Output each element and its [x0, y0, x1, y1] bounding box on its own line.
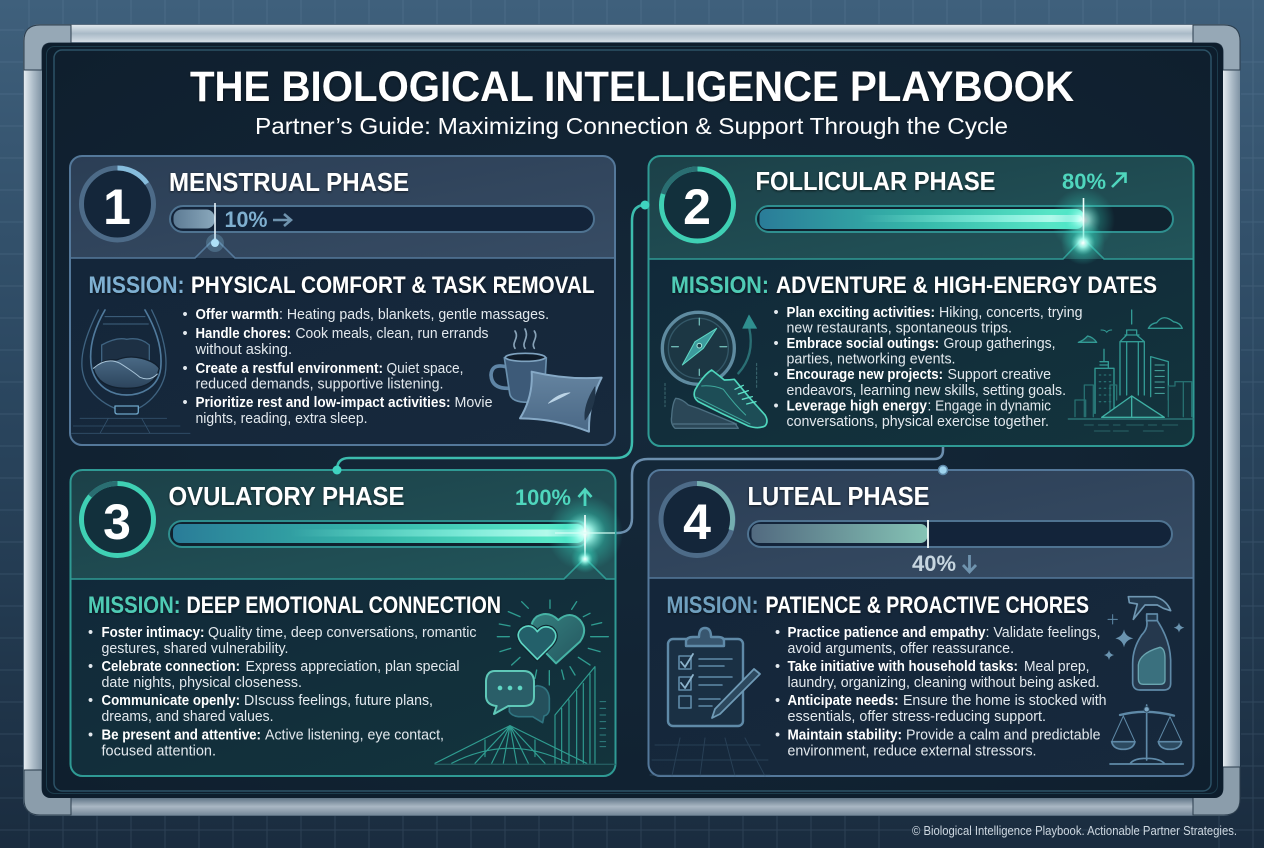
connector node: phase 2 left — [640, 200, 650, 210]
bullet list: Active listening, eye contact, — [265, 728, 444, 744]
bullet list: conversations, physical exercise together. — [786, 414, 1049, 430]
bullet list: Foster intimacy: — [102, 625, 204, 641]
connector node: phase 3 top — [332, 466, 342, 474]
bullet list: Cook meals, clean, run errands — [296, 326, 488, 342]
icon: coffee cup and pillow — [491, 329, 602, 432]
bullet list: • — [774, 367, 779, 383]
number badge 3: 3 — [103, 494, 131, 550]
icon: clipboard and pencil — [668, 628, 760, 726]
number badge 3 — [82, 483, 154, 556]
panel: ovulatory phase — [70, 470, 623, 776]
bullet list — [182, 307, 549, 427]
mission heading: MISSION: — [666, 592, 758, 619]
bullet list: essentials, offer stress-reducing support. — [788, 709, 1046, 725]
bullet list: DIscuss feelings, future plans, — [244, 693, 433, 709]
bullet list: without asking. — [194, 342, 292, 358]
energy value 80%: 80% — [1062, 169, 1106, 194]
mission heading: PATIENCE & PROACTIVE CHORES — [766, 592, 1089, 619]
bullet list: Take initiative with household tasks: — [788, 659, 1018, 675]
bullet list — [775, 625, 1106, 760]
connector: phase 2 to phase 4 — [600, 446, 943, 533]
connector node: phase 4 top — [938, 466, 948, 474]
bullet list: Provide a calm and predictable — [906, 728, 1100, 744]
bullet list: focused attention. — [102, 744, 216, 760]
bullet list: endeavors, learning new skills, setting goals. — [786, 383, 1066, 399]
energy bar 80% — [756, 188, 1173, 265]
bullet list: date nights, physical closeness. — [102, 675, 302, 691]
bullet list: • — [182, 307, 188, 323]
bullet list: Ensure the home is stocked with — [903, 693, 1106, 709]
bullet list: • — [88, 728, 93, 744]
bullet list: Be present and attentive: — [102, 728, 261, 744]
panel: luteal phase — [648, 470, 1194, 776]
bullet list: • — [774, 398, 779, 414]
bullet list: new restaurants, spontaneous trips. — [786, 320, 1012, 336]
bullet list: Support creative — [948, 367, 1051, 383]
bullet list: laundry, organizing, cleaning without being asked. — [788, 675, 1100, 691]
bullet list: Group gatherings, — [944, 336, 1056, 352]
number badge 2: 2 — [683, 179, 711, 235]
bullet list: Maintain stability: — [788, 728, 902, 744]
energy bar 10% — [170, 203, 594, 252]
bullet list: • — [88, 659, 93, 675]
bullet list: • — [182, 326, 188, 342]
energy value 40%: 40% — [912, 551, 956, 576]
mission heading: MISSION: — [88, 272, 184, 299]
bullet list: : Validate feelings, — [986, 625, 1100, 641]
bullet list: Handle chores: — [196, 326, 291, 342]
bullet list: Express appreciation, plan special — [246, 659, 460, 675]
mission heading: ADVENTURE & HIGH-ENERGY DATES — [776, 272, 1157, 299]
bullet list: Anticipate needs: — [788, 693, 898, 709]
bullet list: Hiking, concerts, trying — [939, 305, 1082, 321]
bullet list: • — [775, 728, 780, 744]
mission heading: PHYSICAL COMFORT & TASK REMOVAL — [191, 272, 594, 299]
bullet list: • — [774, 305, 779, 321]
energy value 100%: 100% — [515, 485, 571, 510]
bullet list: gestures, shared vulnerability. — [102, 641, 288, 657]
bullet list: Celebrate connection: — [102, 659, 240, 675]
bullet list: Leverage high energy — [786, 398, 927, 414]
number badge 4 — [661, 484, 733, 556]
bullet list: parties, networking events. — [786, 352, 956, 368]
connector: phase 3 to phase 2 — [337, 205, 650, 470]
bullet list: nights, reading, extra sleep. — [196, 411, 368, 427]
energy bar 40% — [748, 520, 1172, 548]
icon: spray bottle and sparkles — [1104, 597, 1184, 690]
bullet list: • — [775, 693, 780, 709]
bullet list: • — [775, 659, 780, 675]
bullet list: Offer warmth — [196, 307, 279, 323]
phase heading: MENSTRUAL PHASE — [169, 167, 409, 197]
icon: balance scale — [1110, 705, 1183, 764]
phase heading: OVULATORY PHASE — [168, 481, 404, 511]
phase heading: FOLLICULAR PHASE — [756, 166, 996, 196]
icon: hearts, chat bubbles and bridge — [435, 600, 615, 764]
bullet list: • — [774, 336, 779, 352]
icon: reclining chair — [72, 310, 190, 433]
bullet list: Practice patience and empathy — [788, 625, 986, 641]
bullet list: • — [775, 625, 780, 641]
panel: follicular phase — [648, 156, 1194, 446]
mission heading — [666, 592, 1089, 619]
bullet list: avoid arguments, offer reassurance. — [788, 641, 1014, 657]
title: THE BIOLOGICAL INTELLIGENCE PLAYBOOK — [190, 63, 1074, 111]
energy value 80% — [1062, 169, 1126, 194]
mission heading — [88, 592, 501, 619]
bullet list: Encourage new projects: — [786, 367, 943, 383]
bullet list — [774, 305, 1082, 430]
energy value 40% — [912, 551, 976, 576]
bullet list: Communicate openly: — [102, 693, 240, 709]
number badge 2 — [662, 169, 734, 241]
panel: menstrual phase — [70, 156, 615, 445]
number badge 1: 1 — [103, 179, 131, 235]
bullet list: • — [88, 625, 93, 641]
bullet list: : Heating pads, blankets, gentle massages. — [279, 307, 549, 323]
bullet list: dreams, and shared values. — [102, 709, 274, 725]
mission heading: MISSION: — [671, 272, 769, 299]
number badge 4: 4 — [683, 494, 711, 550]
mission heading: MISSION: — [88, 592, 180, 619]
bullet list: Create a restful environment: — [196, 361, 383, 377]
energy bar 10%: 10% — [224, 207, 268, 232]
bullet list: : Engage in dynamic — [928, 398, 1051, 414]
footer credit: © Biological Intelligence Playbook. Actionable Partner Strategies. — [912, 824, 1237, 838]
phase heading: LUTEAL PHASE — [748, 481, 930, 511]
bullet list: Prioritize rest and low-impact activities: — [196, 395, 450, 411]
number badge 1 — [82, 168, 154, 240]
bullet list: Quality time, deep conversations, romantic — [208, 625, 476, 641]
bullet list: • — [88, 693, 93, 709]
bullet list: Movie — [454, 395, 492, 411]
bullet list: • — [182, 395, 188, 411]
subtitle: Partner’s Guide: Maximizing Connection & Support Through the Cycle — [255, 113, 1008, 139]
mission heading: DEEP EMOTIONAL CONNECTION — [186, 592, 501, 619]
bullet list: Plan exciting activities: — [786, 305, 935, 321]
bullet list: • — [182, 361, 188, 377]
bullet list: environment, reduce external stressors. — [788, 744, 1036, 760]
bullet list: Meal prep, — [1024, 659, 1090, 675]
icon: city skyline — [1068, 310, 1193, 431]
icon: floor grid — [650, 738, 770, 776]
energy bar 100% — [169, 495, 623, 573]
bullet list: Embrace social outings: — [786, 336, 939, 352]
bullet list: reduced demands, supportive listening. — [196, 376, 444, 392]
icon: compass and running shoes — [662, 312, 767, 428]
bullet list: Quiet space, — [386, 361, 464, 377]
bullet list — [88, 625, 476, 760]
